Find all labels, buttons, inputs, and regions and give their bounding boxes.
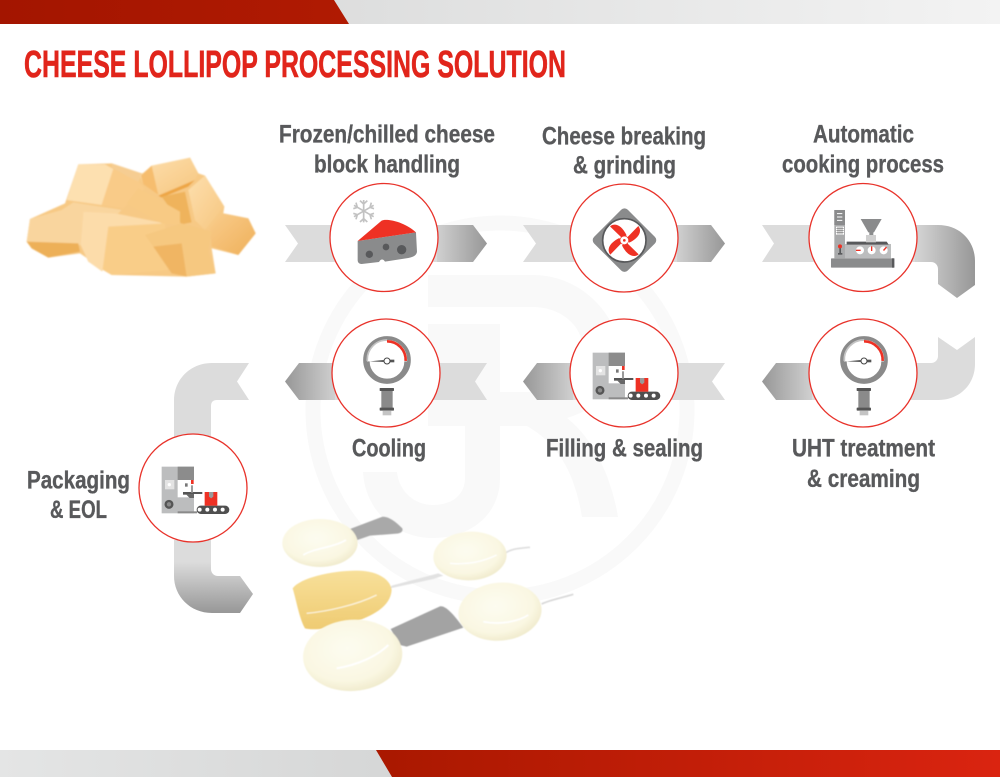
arrow: handling head xyxy=(437,225,487,262)
label: filling and sealing: Filling & sealing xyxy=(546,434,703,462)
label: cheese breaking and grinding: & grinding xyxy=(573,152,676,180)
label: packaging and EOL: & EOL xyxy=(50,496,107,524)
arrow: handling to breaking xyxy=(523,225,725,262)
lollipop front left xyxy=(301,606,463,694)
arrow: cheese to handling xyxy=(285,225,487,262)
arrow: cooling to packaging upper bend xyxy=(174,363,249,440)
label: automatic cooking process: cooking process xyxy=(782,150,944,178)
arrow: UHT head xyxy=(762,363,812,400)
step: cooling xyxy=(332,319,440,462)
icon: cooling gauge xyxy=(365,338,409,415)
label: frozen/chilled cheese block handling: Frozen/chilled cheese xyxy=(279,120,495,148)
photo: cheese chunks xyxy=(27,158,256,277)
step circle xyxy=(330,184,438,292)
lollipop yellow xyxy=(293,571,443,629)
step: packaging and EOL xyxy=(27,434,247,542)
icon: packaging machine xyxy=(162,467,229,514)
label: frozen/chilled cheese block handling: block handling xyxy=(314,150,460,178)
lollipop front right xyxy=(456,579,573,644)
arrow: turn into UHT xyxy=(810,337,975,400)
label: cooling: Cooling xyxy=(352,434,426,462)
step circle xyxy=(809,319,917,427)
step circle xyxy=(570,319,678,427)
step: automatic cooking process xyxy=(782,120,944,292)
top header bar xyxy=(0,0,1000,24)
arrow: filling head xyxy=(523,363,573,400)
watermark logo xyxy=(313,223,687,597)
icon: grinder xyxy=(591,206,658,274)
icon: snowflake xyxy=(353,200,374,222)
label: frozen/chilled cheese block handling xyxy=(279,120,495,178)
lollipop back right xyxy=(432,530,530,582)
step: cheese breaking and grinding xyxy=(542,122,706,292)
photo: cheese lollipops xyxy=(282,517,573,694)
label: UHT treatment and creaming: UHT treatment xyxy=(792,434,936,462)
title: CHEESE LOLLIPOP PROCESSING SOLUTION xyxy=(24,44,566,86)
step circle xyxy=(332,319,440,427)
step: frozen block handling xyxy=(279,120,495,292)
label: packaging and EOL: Packaging xyxy=(27,466,130,494)
label: cheese breaking and grinding: Cheese breaking xyxy=(542,122,706,150)
label: cheese breaking and grinding xyxy=(542,122,706,180)
icon: cheese wedge xyxy=(358,220,417,264)
label: automatic cooking process xyxy=(782,120,944,178)
arrow: breaking head xyxy=(677,225,725,262)
lollipop back left xyxy=(282,517,403,567)
arrow: UHT to filling xyxy=(573,363,725,400)
step: filling and sealing xyxy=(546,319,703,462)
arrow: packaging to lollipops lower bend xyxy=(174,540,253,613)
icon: cooker machine xyxy=(831,210,894,268)
icon: filling machine xyxy=(593,353,660,400)
arrow: cooking curved turn down xyxy=(915,225,975,298)
label: UHT treatment and creaming: & creaming xyxy=(807,465,920,493)
icon: pressure gauge xyxy=(842,338,886,415)
arrow: cooling head xyxy=(285,363,335,400)
label: automatic cooking process: Automatic xyxy=(813,120,914,148)
bottom footer bar xyxy=(0,750,1000,777)
label: packaging and EOL xyxy=(27,466,130,524)
label: UHT treatment and creaming xyxy=(792,434,936,493)
arrow: breaking to cooking xyxy=(762,225,917,262)
arrow: filling to cooling xyxy=(335,363,487,400)
step circle xyxy=(570,184,678,292)
step circle xyxy=(139,434,247,542)
step circle xyxy=(809,184,917,292)
step: UHT treatment and creaming xyxy=(792,319,936,493)
